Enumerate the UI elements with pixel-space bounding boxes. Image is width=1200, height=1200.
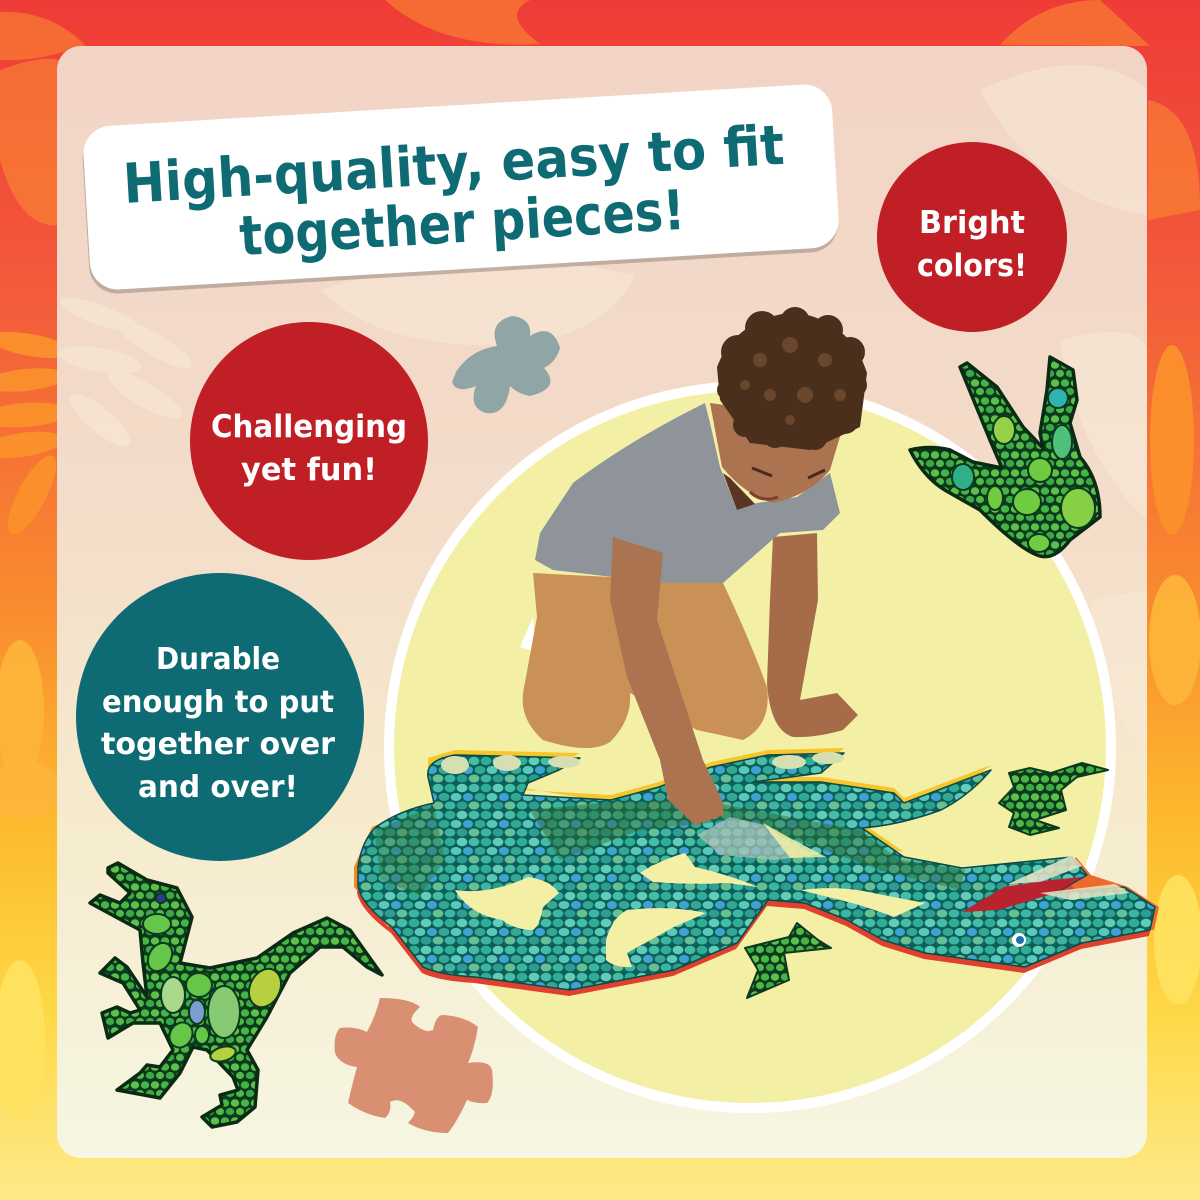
badge: durable: together over [101,727,335,762]
badge: durable: enough to put [102,685,334,720]
badge: durable: Durable [156,642,280,677]
near arm [610,537,724,825]
illustration: boy assembling puzzle [520,307,867,825]
icon: salmon puzzle piece [335,998,493,1133]
badge: bright colors: colors! [917,248,1027,284]
badge: bright colors: Bright [919,205,1025,241]
icon: small dino puzzle piece [999,763,1108,835]
grey translucent piece [697,817,815,860]
icon: loose dino puzzle piece [745,923,831,998]
puzzle body [358,753,1155,990]
puzzle edge: red bottom [357,809,1154,996]
badge: challenging yet fun: yet fun! [241,452,377,488]
title text second line: together pieces! [238,178,687,268]
puzzle edge: yellow top [428,748,991,852]
trousers [523,573,768,748]
darker back shading [530,800,965,890]
sock [520,617,536,652]
title banner [81,83,840,295]
face [710,403,845,503]
shirt [535,403,840,583]
icon: grey puzzle piece [452,316,560,413]
eye [1012,933,1026,947]
badge: durable: and over! [138,770,298,805]
badge: durable [76,573,364,861]
claws [441,752,844,774]
yellow circle [389,386,1111,1108]
dinosaur puzzle [354,748,1159,996]
title text: High-quality, easy to fit [121,113,786,216]
neck [723,473,755,510]
hair [717,307,867,450]
icon: dinosaur footprint [910,357,1100,557]
gaps in puzzle [455,823,925,967]
mouth [962,877,1082,912]
icon: raptor dinosaur [90,863,382,1127]
far arm [767,533,858,737]
badge: challenging yet fun: Challenging [211,409,407,445]
badge: challenging yet fun [190,322,428,560]
mouth and eyes [750,492,778,499]
badge: bright colors [877,142,1067,332]
